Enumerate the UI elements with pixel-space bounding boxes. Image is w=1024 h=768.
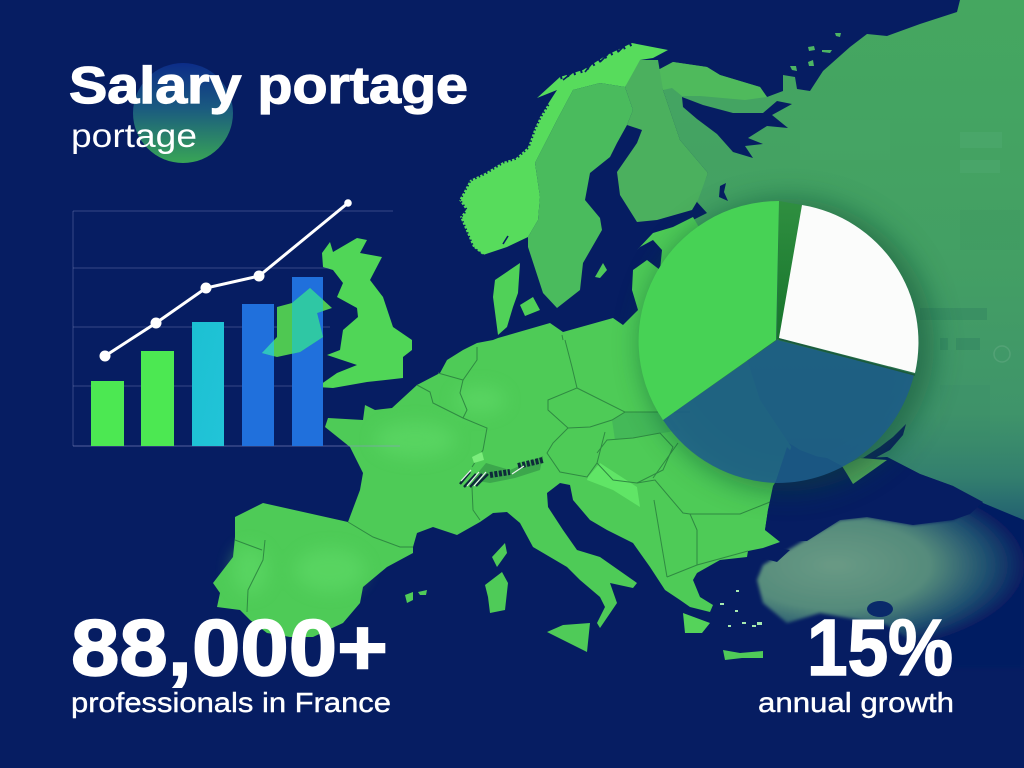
map: bright Croatia and Slovenia xyxy=(587,463,640,507)
map: Russia region xyxy=(658,0,1024,520)
map: Sea of Azov xyxy=(863,424,906,458)
map: mainland Europe xyxy=(213,217,800,637)
map: Great Britain xyxy=(317,238,412,388)
pie slice: green xyxy=(639,201,779,420)
map: Russia interior texture xyxy=(800,120,1020,455)
map: Black Sea xyxy=(765,445,983,541)
map: light patches xyxy=(232,386,505,594)
pie wedge gap xyxy=(777,201,802,339)
pie chart xyxy=(639,199,934,491)
map: Gotland xyxy=(595,263,607,278)
stat value 15%: 15% xyxy=(807,603,953,692)
map: Sardinia xyxy=(485,572,508,613)
map: Ireland over bars xyxy=(262,288,332,357)
subtitle: portage xyxy=(71,117,197,154)
trend line xyxy=(100,199,352,362)
map: Denmark xyxy=(493,263,520,335)
stat label: annual growth xyxy=(758,687,954,718)
map: Sea of Marmara xyxy=(762,548,790,562)
statistic: annual growth xyxy=(758,603,954,718)
map of Europe xyxy=(213,0,1024,668)
map: Turkey haze xyxy=(757,503,1024,668)
statistic: professionals in France xyxy=(71,603,391,718)
bar 2 xyxy=(141,351,174,446)
map: Norway xyxy=(459,43,668,255)
stat label: professionals in France xyxy=(71,687,391,718)
map: Danish island xyxy=(520,297,540,316)
pie shadow xyxy=(642,199,934,491)
bar 3 xyxy=(192,322,224,446)
map: Sweden xyxy=(528,83,633,308)
map: Finland xyxy=(617,60,708,222)
bar chart xyxy=(73,199,400,446)
map: Crimea xyxy=(842,458,887,484)
map: Lake Ladoga xyxy=(719,183,728,201)
map: Slovakia and Poland shade xyxy=(612,412,680,440)
map: Arctic islands xyxy=(790,33,841,71)
pie slice: white xyxy=(779,205,918,373)
map: Alps xyxy=(460,452,543,487)
decorative circle behind subtitle xyxy=(133,63,233,163)
stat value 88,000+: 88,000+ xyxy=(71,603,388,692)
map: Balearic islands xyxy=(405,590,427,603)
map: Kola peninsula xyxy=(658,62,767,100)
map: Aegean islands xyxy=(720,590,762,627)
map: Peloponnese xyxy=(683,613,710,633)
map: national borders xyxy=(235,335,770,612)
bar 5 xyxy=(292,277,323,446)
pie slice: blue xyxy=(663,340,914,483)
map: Mediterranean bay in Turkey xyxy=(867,601,893,617)
map: White Sea xyxy=(682,97,792,158)
pie dark edge xyxy=(779,339,915,375)
map: Norway jagged coast xyxy=(459,43,632,256)
map: Corsica xyxy=(492,543,507,567)
map: Sicily xyxy=(547,623,590,652)
bar 1 xyxy=(91,381,124,446)
chart gridlines xyxy=(73,211,400,446)
map: Crete xyxy=(723,650,763,660)
title: Salary portage xyxy=(69,57,468,115)
bar 4 xyxy=(242,304,274,446)
